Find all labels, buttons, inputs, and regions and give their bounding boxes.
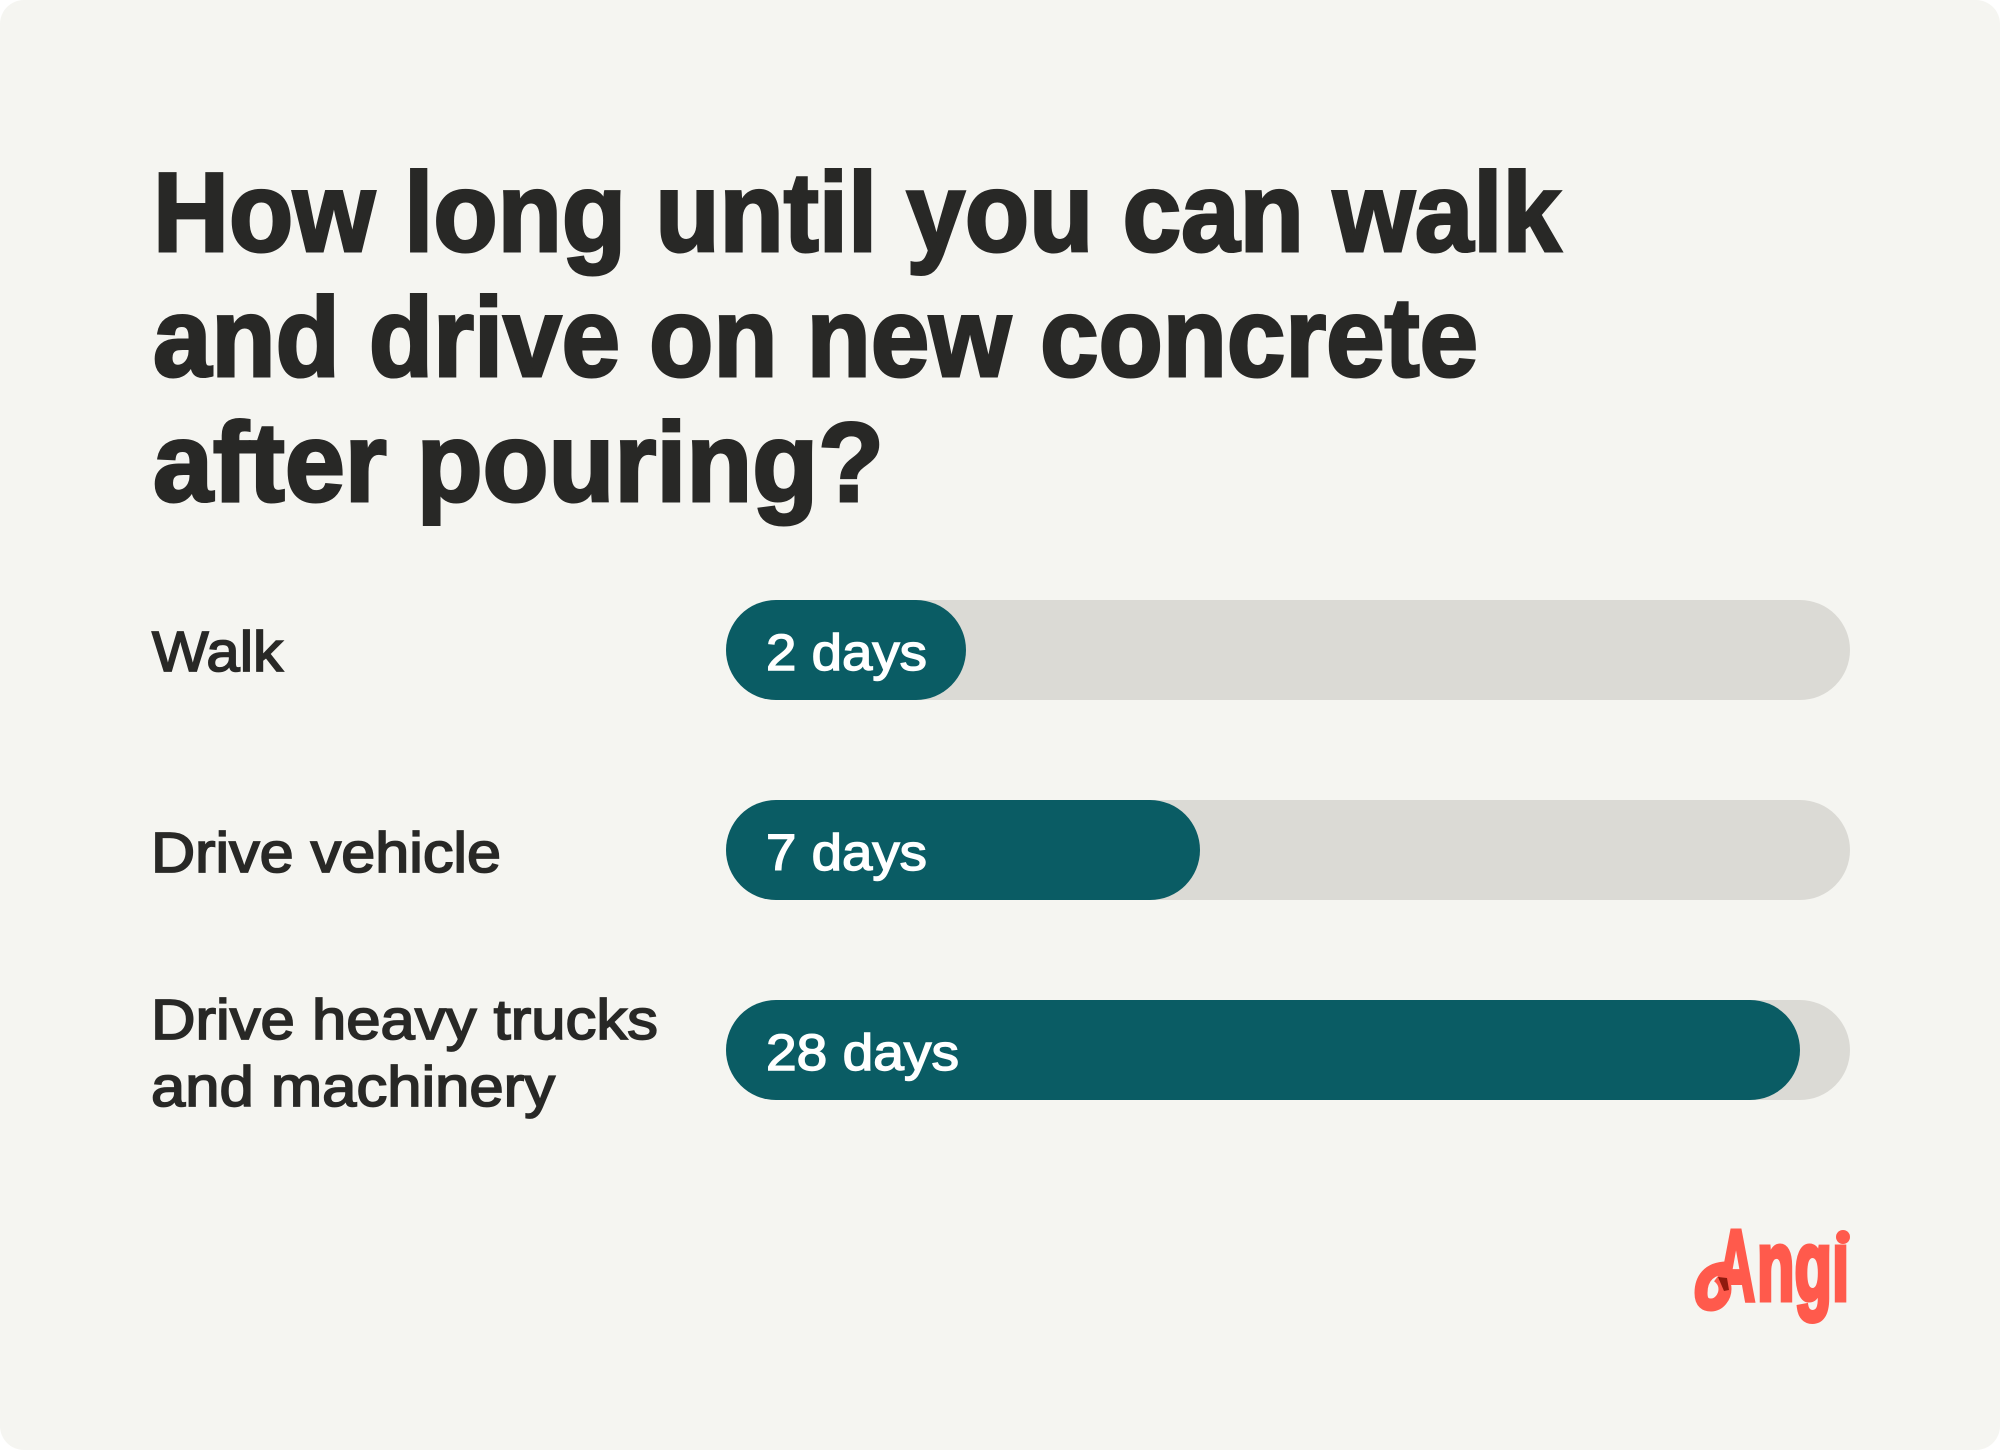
row: drive heavy trucks bbox=[151, 988, 1850, 1119]
bar fill: heavy trucks bbox=[726, 1000, 1800, 1100]
bar fill: walk bbox=[726, 600, 966, 700]
label: drive heavy trucks and machinery: and machinery bbox=[151, 1055, 556, 1119]
title: How long until you can walk bbox=[153, 150, 1562, 275]
value: 28 days: 28 days bbox=[766, 1024, 959, 1081]
bar fill: drive vehicle bbox=[726, 800, 1200, 900]
bar track: walk bbox=[726, 600, 1850, 700]
logo: Angi: ngı bbox=[1757, 1210, 1849, 1322]
title: and drive on new concrete bbox=[153, 275, 1478, 400]
bar track: drive vehicle bbox=[726, 800, 1850, 900]
label: drive heavy trucks and machinery: Drive heavy trucks bbox=[151, 988, 658, 1052]
label: drive heavy trucks and machinery bbox=[151, 988, 658, 1119]
title: after pouring? bbox=[153, 400, 884, 525]
value: 7 days: 7 days bbox=[766, 824, 927, 881]
title bbox=[153, 150, 1562, 525]
label: walk: Walk bbox=[152, 620, 284, 684]
row: drive vehicle bbox=[151, 800, 1850, 900]
label: drive vehicle: Drive vehicle bbox=[151, 821, 501, 885]
value: 2 days: 2 days bbox=[766, 624, 927, 681]
logo: Angi: A bbox=[1717, 1210, 1755, 1322]
bar track: heavy trucks bbox=[726, 1000, 1850, 1100]
logo: Angi bbox=[1701, 1210, 1850, 1322]
row: walk bbox=[152, 600, 1850, 700]
